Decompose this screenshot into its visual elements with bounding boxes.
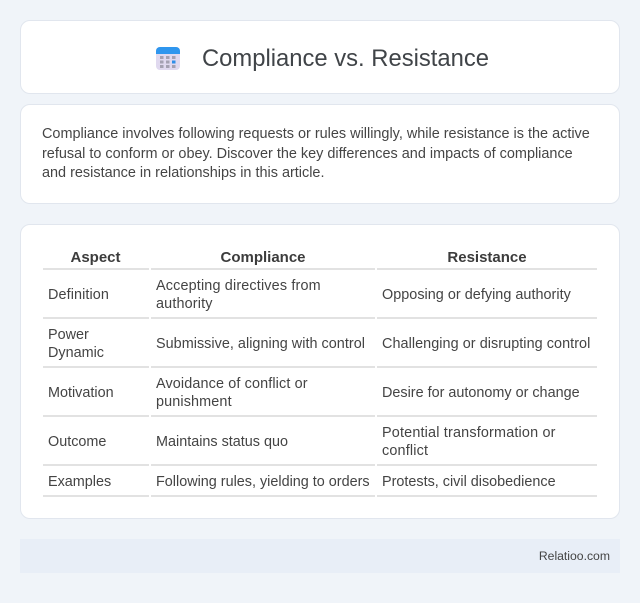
intro text — [42, 126, 590, 181]
comparison table: Aspect — [70, 249, 121, 266]
footer credit: Relatioo.com — [539, 549, 610, 563]
comparison table: Motivation — [48, 385, 114, 401]
intro text: Compliance involves following requests or rules willingly, while resistance is the active — [42, 126, 590, 142]
comparison table: Compliance — [220, 249, 306, 266]
title: Compliance vs. Resistance — [202, 45, 489, 72]
table panel — [20, 224, 620, 519]
intro panel — [20, 104, 620, 204]
comparison table: Opposing or defying authority — [382, 287, 571, 303]
footer bar — [20, 539, 620, 573]
comparison table: Potential transformation or — [382, 425, 556, 441]
comparison table: Maintains status quo — [156, 434, 288, 450]
comparison table: Power — [48, 327, 89, 343]
comparison table: Accepting directives from — [156, 278, 321, 294]
table rules — [43, 268, 597, 497]
comparison table: Following rules, yielding to orders — [156, 474, 370, 490]
table headers — [70, 249, 527, 266]
icon: calendar — [156, 47, 180, 70]
comparison table: Protests, civil disobedience — [382, 474, 556, 490]
comparison table: Definition — [48, 287, 109, 303]
comparison table: Submissive, aligning with control — [156, 336, 365, 352]
comparison table: Outcome — [48, 434, 106, 450]
intro text: and resistance in relationships in this article. — [42, 165, 324, 181]
comparison table: authority — [156, 296, 213, 312]
table body text — [48, 278, 590, 490]
comparison table: Dynamic — [48, 345, 104, 361]
header panel — [20, 20, 620, 94]
comparison table: Challenging or disrupting control — [382, 336, 590, 352]
comparison table — [43, 249, 597, 497]
comparison table: Examples — [48, 474, 111, 490]
comparison table: punishment — [156, 394, 232, 410]
intro text: refusal to conform or obey. Discover the key differences and impacts of compliance — [42, 146, 573, 162]
comparison table: Avoidance of conflict or — [156, 376, 308, 392]
comparison table: Desire for autonomy or change — [382, 385, 580, 401]
comparison table: Resistance — [447, 249, 527, 266]
comparison table: conflict — [382, 443, 428, 459]
